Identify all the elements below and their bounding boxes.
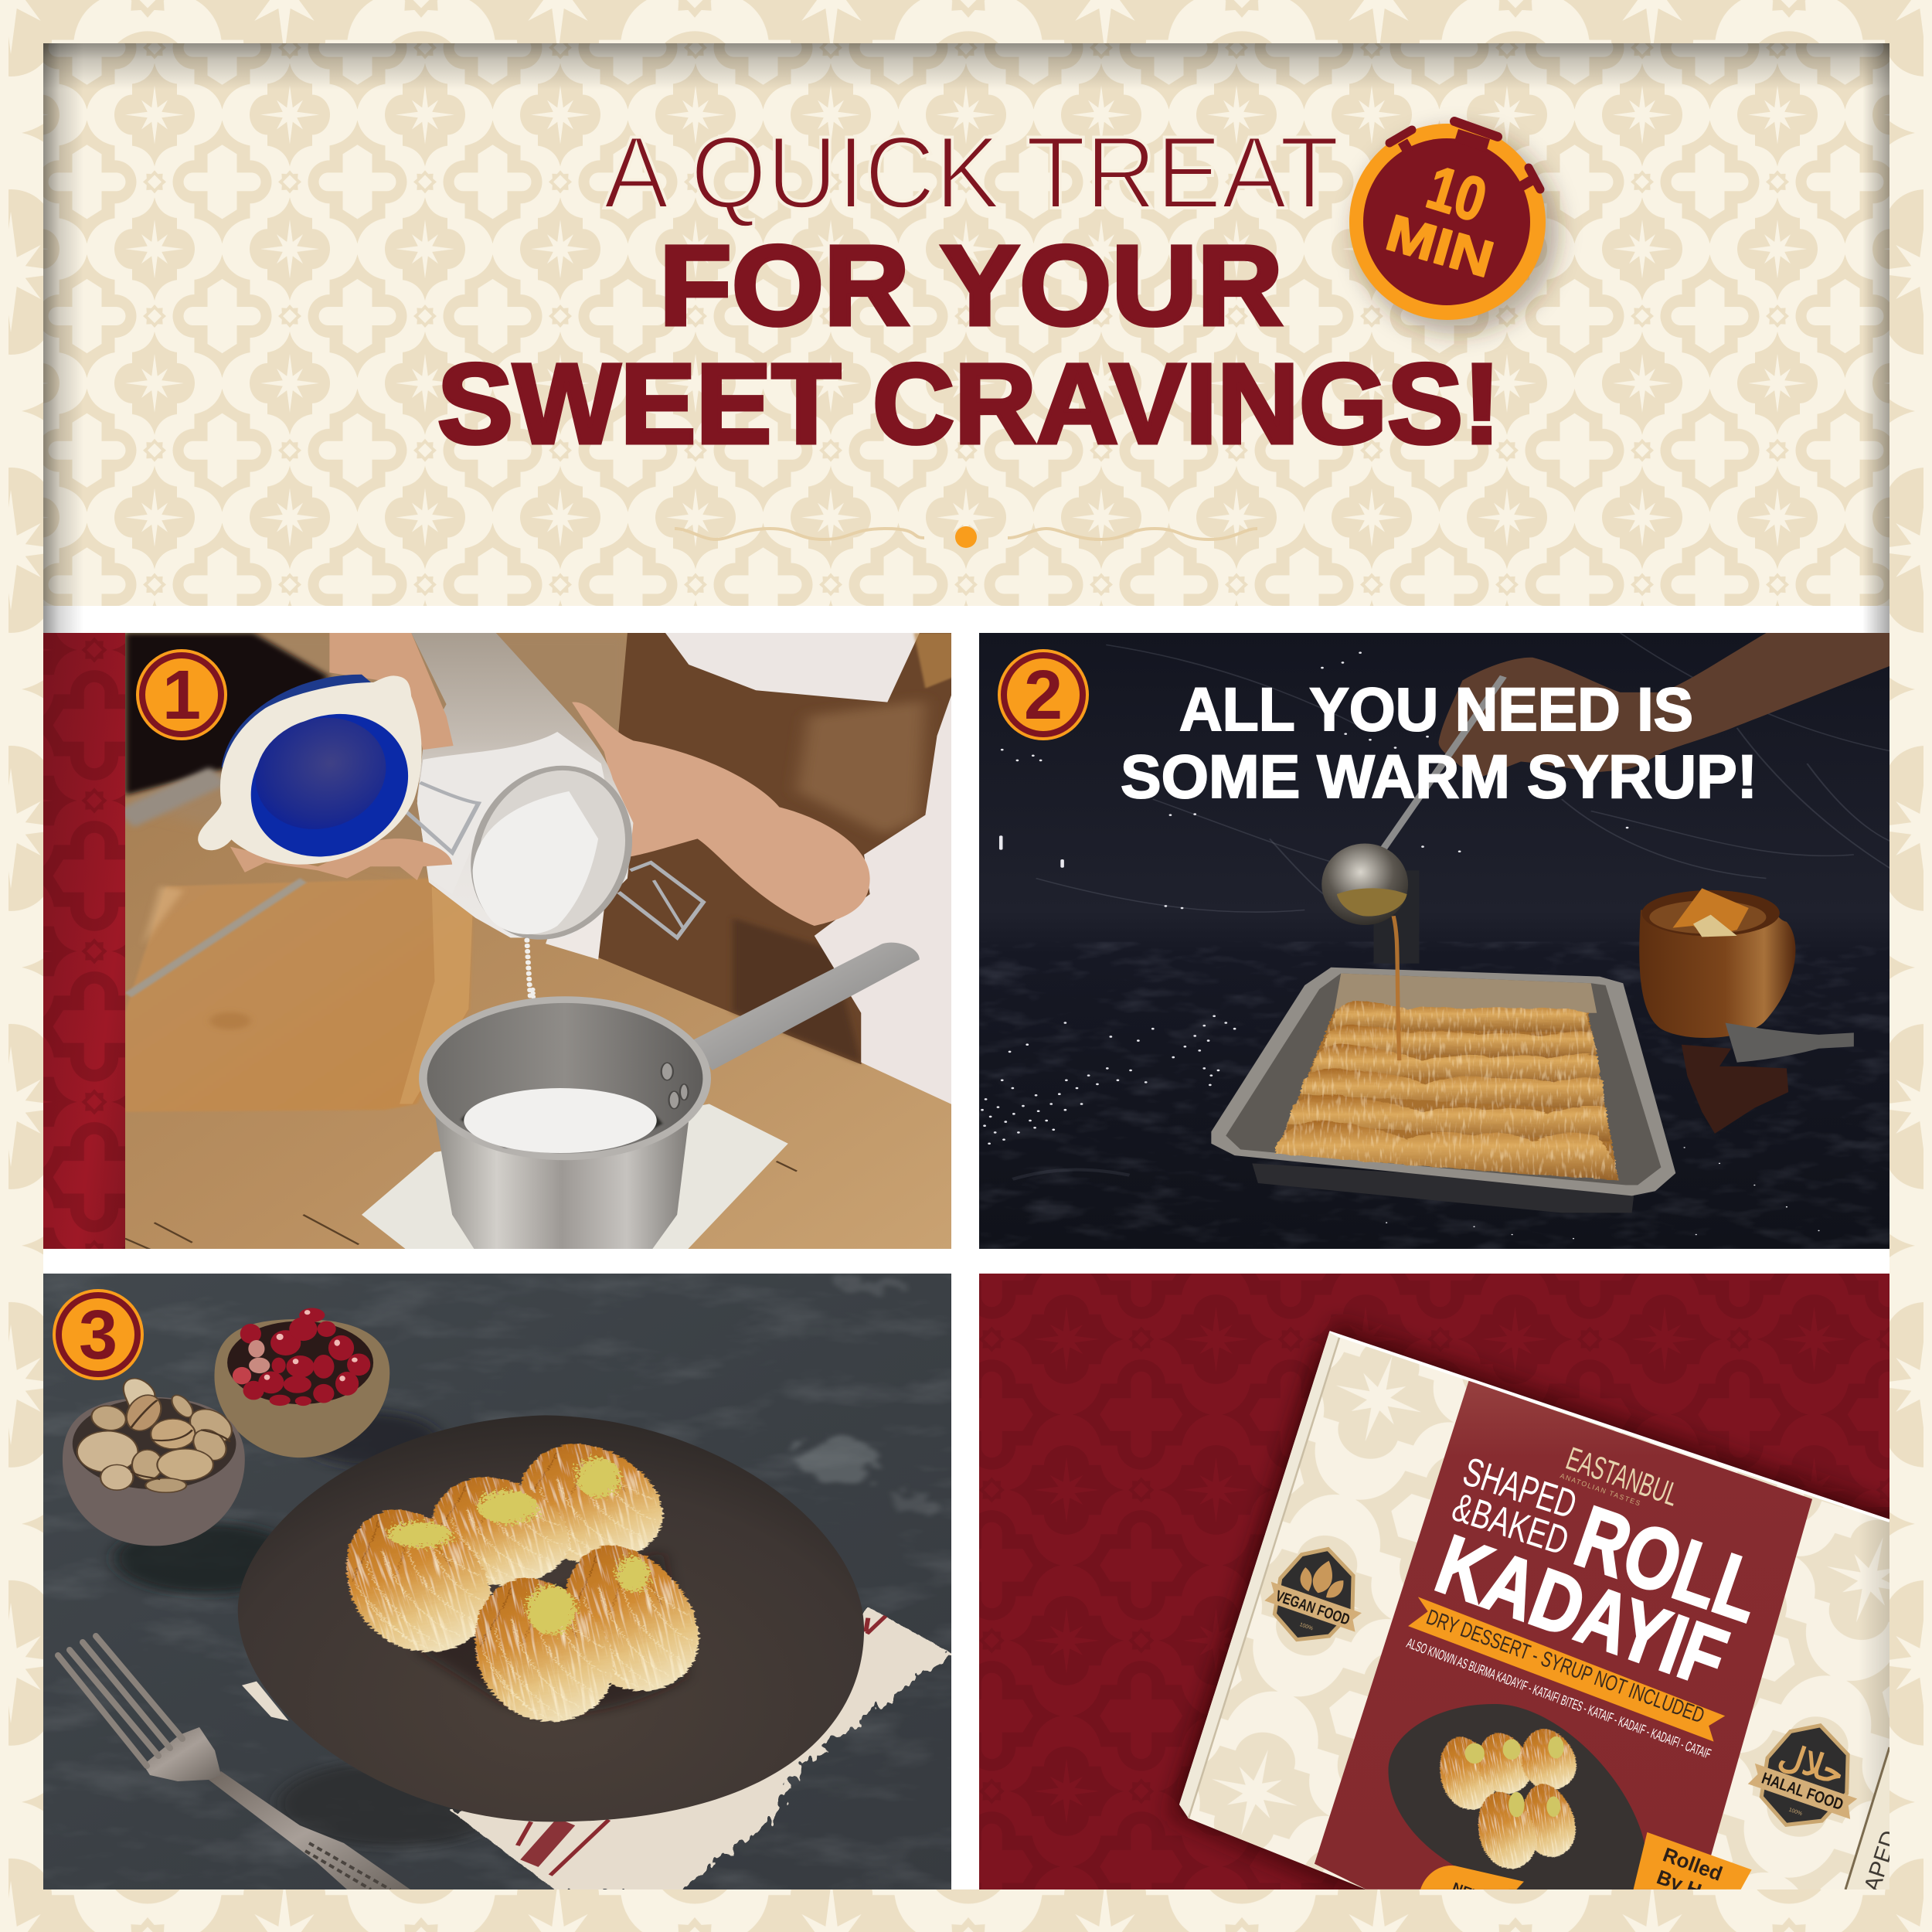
badge: vegan food: 100% <box>1299 1622 1314 1631</box>
title <box>437 116 1501 468</box>
maroon patterned background <box>979 1274 1889 1889</box>
badge: vegan food <box>1256 1535 1378 1657</box>
ladle <box>1321 676 1503 925</box>
panel: product box <box>979 1274 1903 1926</box>
badge: step 1: 1 <box>162 657 201 734</box>
kitchen scale <box>362 1104 788 1251</box>
kadayif: KADAYIF <box>1425 1517 1738 1705</box>
syrup cup <box>1639 888 1795 1038</box>
bowl with pomegranate <box>214 1308 389 1458</box>
stopwatch number: 10 <box>1420 152 1494 235</box>
salt specks <box>982 653 1818 1239</box>
jar lid <box>198 675 427 866</box>
baking tray <box>1211 968 1675 1213</box>
pot with sugar <box>419 943 920 1251</box>
title line 2: FOR YOUR <box>659 223 1283 349</box>
caption line 1: ALL YOU NEED IS <box>1179 675 1693 743</box>
panel: step 2 warm syrup <box>978 633 1893 1251</box>
plate <box>238 1415 864 1821</box>
cutting board <box>125 879 473 1112</box>
marble streaks <box>1012 633 1893 1179</box>
roll D <box>548 1538 713 1699</box>
rolled by hand text line 2: By Hand <box>1654 1865 1738 1915</box>
red label band <box>1315 1381 1812 1889</box>
badge: step 2 <box>998 649 1089 740</box>
roll A <box>327 1499 507 1662</box>
falling sugar <box>524 938 536 998</box>
box face <box>1179 1332 1889 1889</box>
metal tool <box>1726 1023 1854 1063</box>
broken chocolate <box>1682 1045 1788 1134</box>
sugar jar <box>406 633 703 944</box>
table grain <box>125 1162 797 1251</box>
kadayif rows <box>1276 1001 1618 1180</box>
second box edge <box>1845 1747 1903 1926</box>
apron and shirt <box>546 633 955 1106</box>
arm and hand <box>572 702 870 926</box>
logo tagline: ANATOLIAN TASTES <box>1559 1471 1642 1508</box>
header background pattern <box>43 43 1889 606</box>
roll E <box>461 1571 624 1728</box>
maroon side strip <box>43 633 125 1249</box>
net weight tag <box>1420 1866 1524 1889</box>
arm holding ladle <box>1439 633 1893 777</box>
ribbon text: DRY DESSERT - SYRUP NOT INCLUDED <box>1423 1605 1708 1728</box>
badge: step 3 <box>53 1289 144 1380</box>
fork <box>58 1636 410 1889</box>
slate background <box>43 1274 955 1892</box>
badge: step 2: 2 <box>1024 657 1063 734</box>
title line 3: SWEET CRAVINGS! <box>437 341 1501 468</box>
napkin <box>242 1606 951 1892</box>
divider with dot <box>675 526 1257 548</box>
package logo: EASTANBUL <box>1562 1440 1683 1513</box>
badge: halal food: حلال <box>1774 1736 1849 1793</box>
title line 1: A QUICK TREAT <box>604 116 1339 230</box>
fingers holding jar and lid <box>230 633 454 880</box>
roll: ROLL <box>1564 1488 1774 1641</box>
net weight text: NET W <box>1451 1879 1498 1910</box>
background can <box>1374 870 1419 964</box>
roll C <box>505 1435 675 1571</box>
dark background <box>978 633 1893 1251</box>
bowl with pistachios <box>63 1379 245 1546</box>
baked: &BAKED <box>1447 1485 1574 1564</box>
inset shadow <box>43 43 1889 633</box>
package logo <box>1559 1440 1683 1513</box>
second box edge: SHAPED <box>1849 1828 1903 1926</box>
plate on package <box>1388 1704 1647 1900</box>
caption line 2: SOME WARM SYRUP! <box>1121 742 1757 811</box>
panel: step 3 serving plate <box>43 1274 955 1892</box>
panel: step 1 sugar into pot <box>43 633 955 1251</box>
box shadow <box>1167 1321 1896 1902</box>
syrup pour <box>1393 916 1400 1060</box>
badge: step 1 <box>136 649 227 740</box>
box spine <box>1179 1332 1339 1818</box>
roll B <box>416 1468 582 1594</box>
shaped: SHAPED <box>1458 1449 1582 1528</box>
rolled by hand text: Rolled <box>1660 1842 1726 1886</box>
stopwatch unit: MIN <box>1380 203 1500 288</box>
badge: vegan food: VEGAN FOOD <box>1274 1587 1352 1629</box>
badge: halal food: 100% <box>1788 1808 1803 1817</box>
rolled by hand tag <box>1634 1832 1752 1889</box>
orange ribbon <box>1408 1597 1725 1742</box>
icon: stopwatch 10 min <box>1349 121 1559 334</box>
badge: halal food <box>1740 1709 1876 1844</box>
step 2 caption <box>1121 675 1757 811</box>
kadayif rolls <box>327 1435 713 1728</box>
panel: header <box>43 43 1889 633</box>
table and background <box>43 633 955 1251</box>
pistachio crumbs <box>388 1458 650 1634</box>
package product name <box>1425 1449 1774 1705</box>
badge: halal food: HALAL FOOD <box>1760 1770 1845 1814</box>
badge: step 3: 3 <box>79 1297 117 1374</box>
